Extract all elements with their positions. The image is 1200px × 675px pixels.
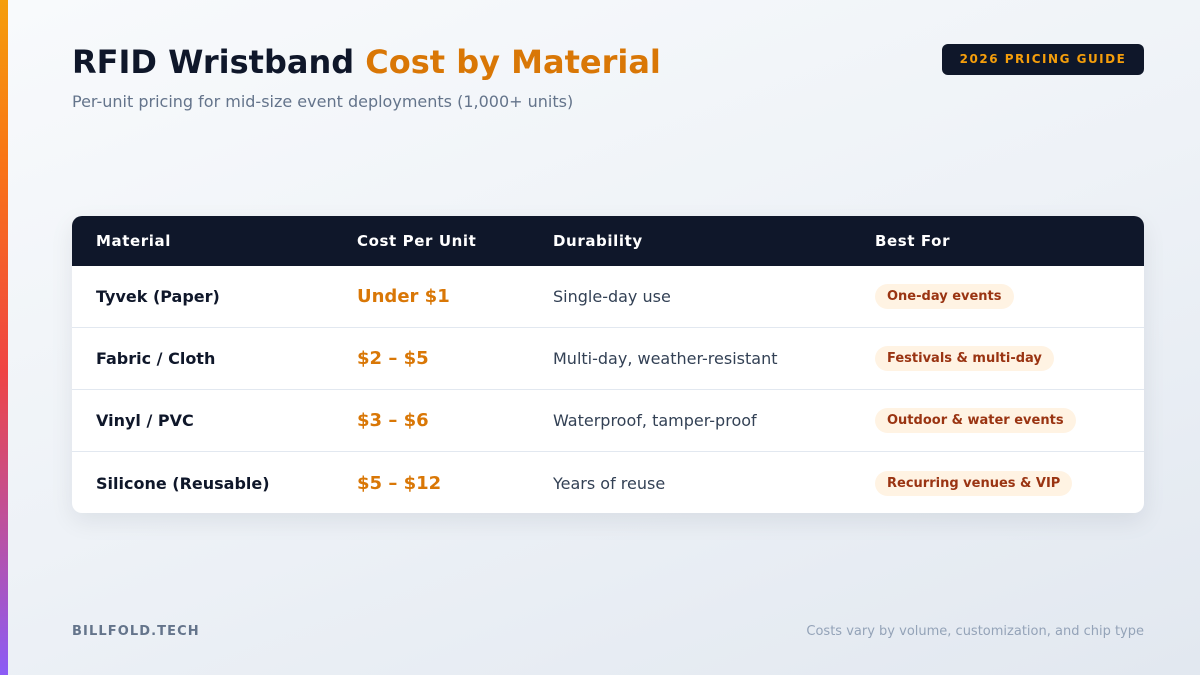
footer note: Costs vary by volume, customization, and chip type	[806, 624, 1144, 639]
badge	[942, 44, 1144, 75]
row: vinyl: Waterproof, tamper-proof	[553, 411, 757, 430]
row: vinyl: Vinyl / PVC	[96, 411, 194, 430]
row: fabric: Festivals & multi-day	[887, 351, 1042, 366]
row: fabric: Multi-day, weather-resistant	[553, 349, 777, 368]
footer brand: BILLFOLD.TECH	[72, 624, 200, 639]
row: tyvek: Single-day use	[553, 287, 671, 306]
subtitle: Per-unit pricing for mid-size event deployments (1,000+ units)	[72, 92, 573, 111]
row: silicone: Years of reuse	[553, 474, 665, 492]
row: tyvek: Under $1	[357, 286, 450, 307]
row: vinyl: Outdoor & water events	[887, 413, 1064, 428]
badge: 2026 PRICING GUIDE	[960, 52, 1126, 66]
row: vinyl	[72, 390, 1144, 452]
row: silicone: Silicone (Reusable)	[96, 474, 270, 492]
accent bar	[0, 0, 8, 675]
table header: Best For	[875, 232, 950, 250]
row: vinyl: $3 – $6	[357, 410, 429, 431]
table header: Material	[96, 232, 171, 250]
row: fabric: $2 – $5	[357, 348, 429, 369]
row: tyvek	[72, 266, 1144, 328]
row: silicone	[96, 471, 1072, 496]
row: silicone: $5 – $12	[357, 472, 441, 494]
row: fabric	[72, 328, 1144, 390]
row: fabric: Fabric / Cloth	[96, 349, 215, 368]
row: silicone: Recurring venues & VIP	[887, 476, 1060, 490]
table header: Cost Per Unit	[357, 232, 476, 250]
table: pricing	[72, 216, 1144, 513]
table header	[72, 216, 1144, 266]
row: tyvek: Tyvek (Paper)	[96, 287, 220, 306]
row: tyvek: One-day events	[887, 289, 1002, 304]
title: RFID Wristband Cost by Material	[72, 43, 661, 81]
table header: Durability	[553, 232, 643, 250]
